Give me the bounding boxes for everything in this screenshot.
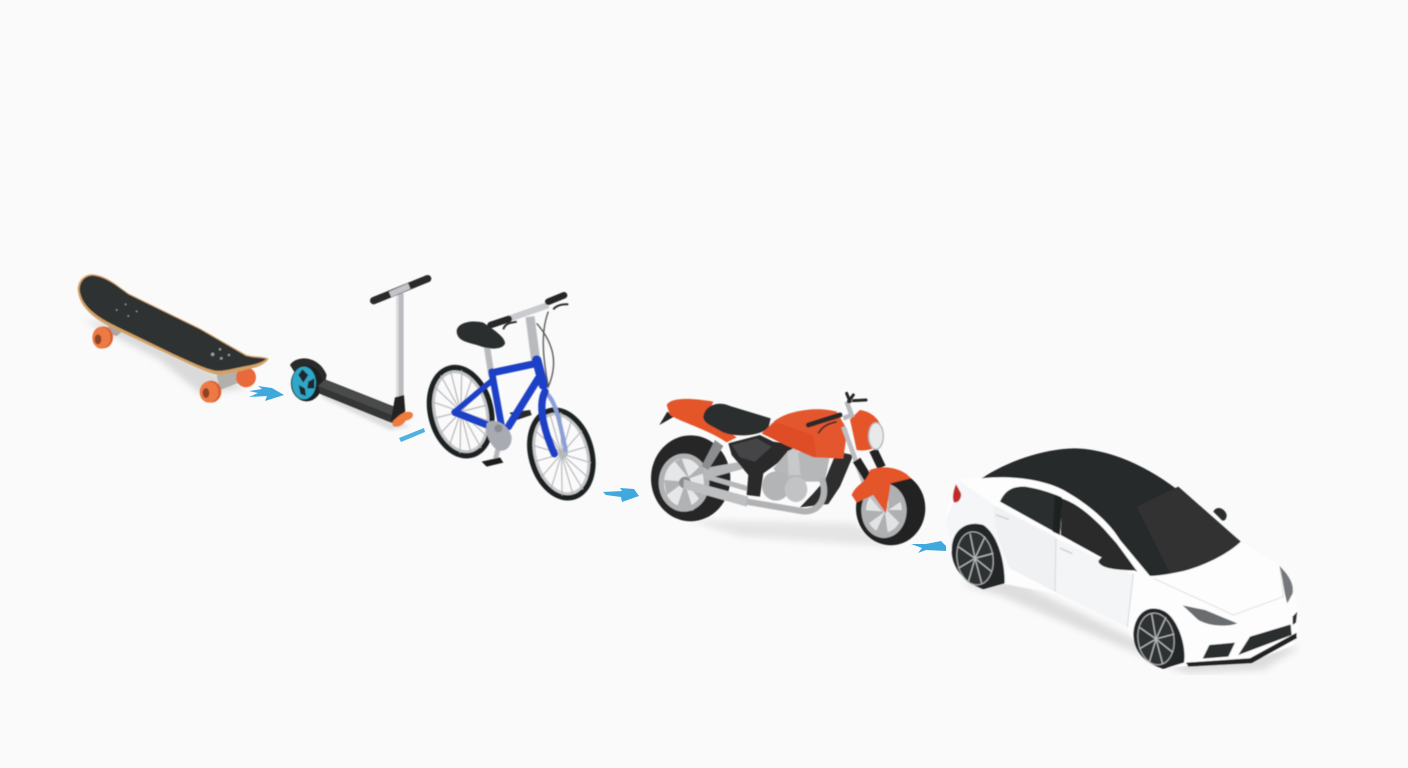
engine (773, 451, 830, 482)
tail (659, 412, 674, 425)
icon: bicycle (421, 295, 602, 505)
side windows (1000, 487, 1062, 535)
swing arm, frame struts and shock (703, 460, 750, 492)
arrow: skateboard to scooter (249, 386, 284, 401)
front wheel (1133, 608, 1184, 669)
seat post and stem (487, 345, 492, 377)
taillight (953, 484, 961, 502)
arrow: scooter to bicycle (399, 428, 425, 442)
handlebars (808, 415, 840, 425)
icon: car (946, 448, 1300, 673)
front wheel (856, 471, 925, 545)
arrow: motorcycle to car (911, 541, 946, 553)
bumper intakes (1203, 643, 1235, 659)
icon: motorcycle (651, 393, 925, 547)
tank (762, 409, 847, 459)
handlebar (507, 305, 548, 319)
roof (982, 448, 1241, 576)
fork and headlight (843, 427, 885, 512)
door handles and seams (997, 515, 1072, 553)
front fender (852, 467, 911, 513)
rear wheel (421, 361, 501, 462)
rear wheel (651, 435, 730, 521)
icon: kick scooter (290, 279, 428, 430)
front wheel (520, 403, 602, 505)
saddle (457, 321, 505, 349)
rear wheel (952, 524, 1005, 589)
body (946, 452, 1298, 668)
seat (703, 404, 771, 435)
exhaust (683, 479, 748, 507)
headlights (1183, 605, 1237, 626)
frame (455, 360, 566, 454)
icon: skateboard (78, 274, 269, 403)
chainring (486, 421, 512, 451)
pedal (509, 410, 532, 420)
arrow: bicycle to motorcycle (603, 488, 639, 502)
mirrors (1098, 555, 1136, 571)
